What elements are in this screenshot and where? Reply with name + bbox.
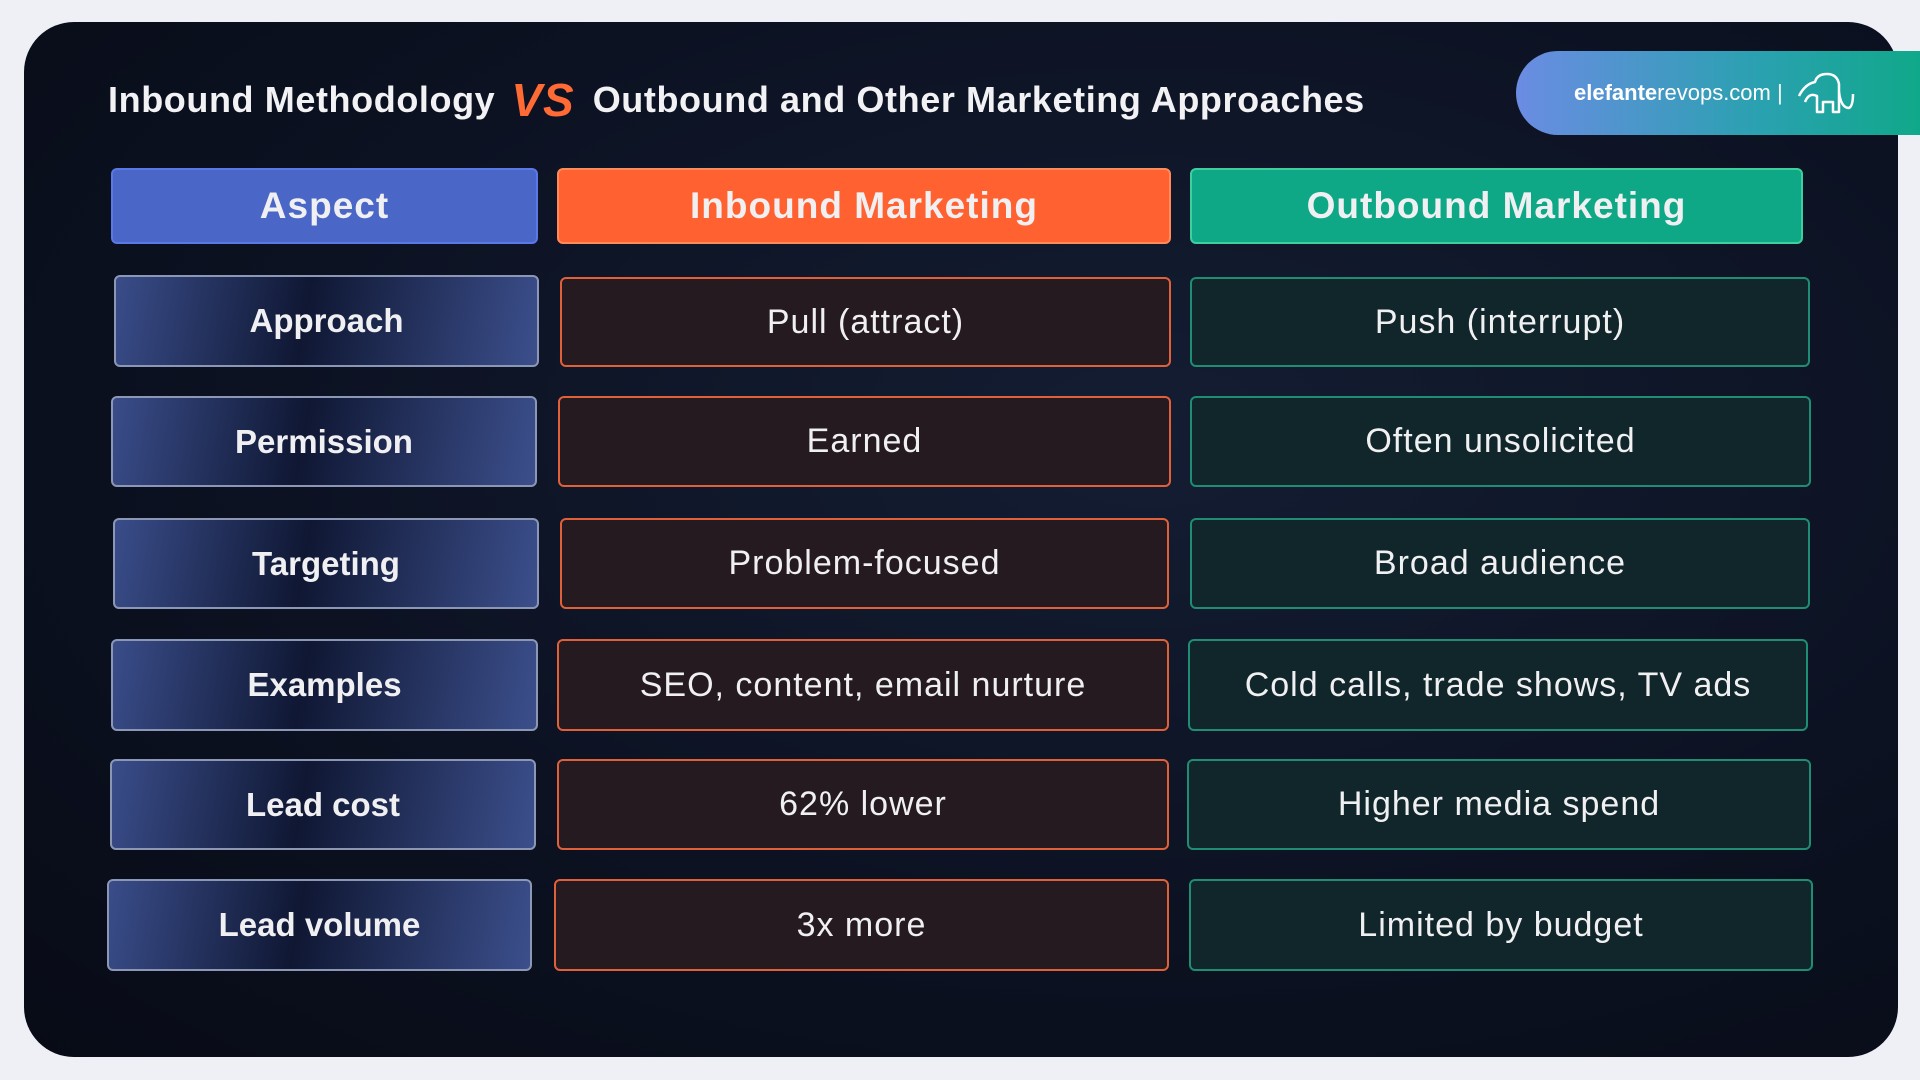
outbound value: Push (interrupt) (1375, 302, 1625, 340)
outbound value: Broad audience (1374, 544, 1626, 582)
row: Examples (111, 639, 1808, 731)
row: Approach (114, 275, 1810, 367)
outbound value: Cold calls, trade shows, TV ads (1245, 666, 1751, 704)
aspect label: Lead cost (246, 786, 400, 822)
inbound value (560, 277, 1171, 367)
outbound value (1187, 759, 1811, 850)
outbound value: Often unsolicited (1365, 422, 1636, 460)
inbound value: Problem-focused (728, 544, 1000, 582)
inbound value (554, 879, 1169, 971)
header: Inbound: Inbound Marketing (690, 185, 1038, 226)
row: Lead cost (110, 759, 1811, 850)
aspect label: Targeting (252, 544, 400, 582)
aspect label: Permission (235, 422, 413, 460)
header: Outbound (1190, 168, 1803, 244)
logo badge (1516, 51, 1920, 135)
outbound value: Higher media spend (1338, 785, 1660, 823)
aspect label (110, 759, 536, 850)
header: Inbound (557, 168, 1171, 244)
outbound value: Limited by budget (1358, 906, 1644, 944)
aspect label (114, 275, 539, 367)
inbound value: Pull (attract) (767, 302, 964, 340)
inbound value (558, 396, 1171, 487)
header: Aspect (111, 168, 538, 244)
logo badge: elefante (1574, 80, 1657, 105)
outbound value (1188, 639, 1808, 731)
inbound value (560, 518, 1169, 609)
outbound value (1190, 277, 1810, 367)
aspect label (111, 396, 537, 487)
outbound value (1190, 518, 1810, 609)
logo badge: revops.com | (1657, 80, 1783, 105)
inbound value: SEO, content, email nurture (640, 666, 1086, 704)
title: VS (511, 74, 575, 126)
aspect label: Lead volume (219, 906, 420, 943)
inbound value: 3x more (797, 906, 926, 944)
aspect label (107, 879, 532, 971)
title: Inbound Methodology Outbound and Other Marketing Approaches (108, 79, 1365, 120)
outbound value (1190, 396, 1811, 487)
header: Outbound: Outbound Marketing (1307, 185, 1686, 226)
inbound value (557, 639, 1169, 731)
row: Permission (111, 396, 1811, 487)
aspect label: Approach (249, 302, 404, 339)
inbound value: 62% lower (779, 785, 947, 823)
inbound value: Earned (807, 422, 922, 460)
row: Lead volume (107, 879, 1813, 971)
row: Targeting (113, 518, 1810, 609)
inbound value (557, 759, 1169, 850)
aspect label: Examples (247, 666, 402, 703)
icon: elephant (1798, 72, 1854, 114)
header: Aspect: Aspect (260, 185, 389, 226)
aspect label (113, 518, 539, 609)
aspect label (111, 639, 538, 731)
outbound value (1189, 879, 1813, 971)
